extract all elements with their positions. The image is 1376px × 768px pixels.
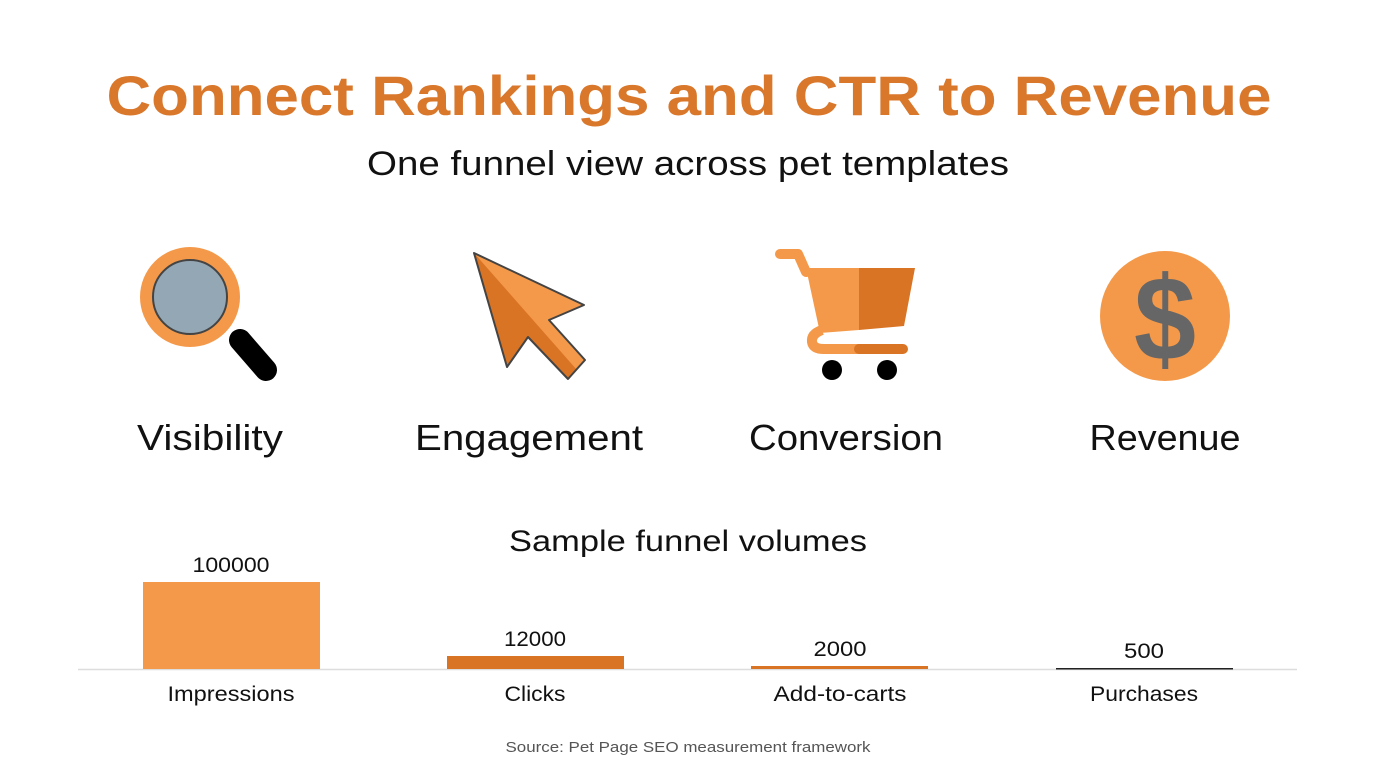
icon: cursor (474, 253, 585, 379)
title: Connect Rankings and CTR to Revenue (106, 64, 1272, 127)
bar chart: 100000 (192, 554, 270, 577)
label: Revenue: Revenue (1090, 417, 1240, 458)
label: Engagement: Engagement (415, 417, 643, 458)
bar chart: Clicks (504, 683, 566, 706)
bar chart: Add-to-carts (774, 683, 906, 706)
subtitle: One funnel view across pet templates (367, 145, 1009, 183)
bar chart: 2000 (814, 638, 866, 661)
bar chart: Purchases (1090, 683, 1198, 706)
icon: magnifier (140, 247, 266, 370)
icon: dollar coin (1100, 251, 1230, 386)
chart title: Sample funnel volumes (509, 525, 867, 558)
icon: dollar coin: $ (1134, 252, 1196, 386)
bar chart (78, 554, 1297, 706)
bar chart: Impressions (168, 683, 294, 706)
source note: Source: Pet Page SEO measurement framework (506, 739, 871, 756)
label: Visibility: Visibility (137, 417, 283, 458)
bar chart: 12000 (504, 628, 566, 651)
bar chart: 500 (1124, 640, 1164, 663)
icon: cart (780, 254, 915, 380)
label: Conversion: Conversion (749, 417, 943, 458)
